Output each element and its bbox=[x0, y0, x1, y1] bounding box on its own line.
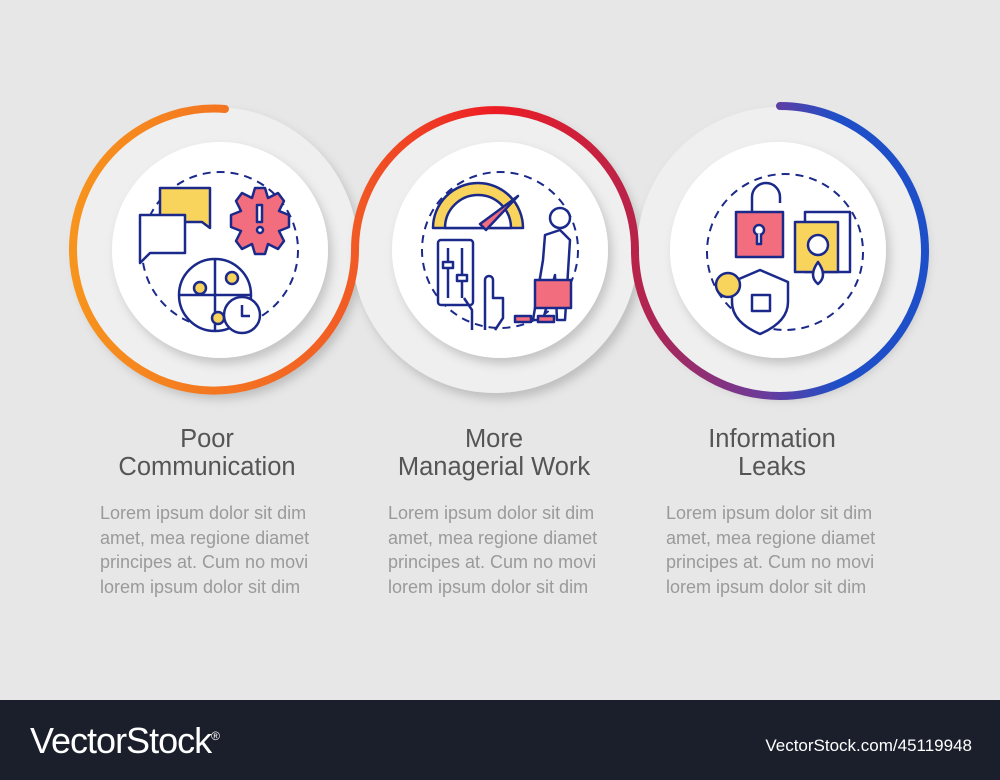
footer url: VectorStock.com/45119948 bbox=[765, 736, 972, 755]
text: body 2: amet, mea regione diamet bbox=[388, 528, 597, 548]
text: body 1: lorem ipsum dolor sit dim bbox=[100, 576, 300, 596]
title: information leaks: Leaks bbox=[738, 453, 806, 481]
text: body 1: principes at. Cum no movi bbox=[100, 552, 308, 572]
title: information leaks bbox=[708, 425, 836, 481]
icon: managerial work bbox=[422, 172, 578, 330]
text: body 2: principes at. Cum no movi bbox=[388, 552, 596, 572]
footer logo: VectorStock® bbox=[30, 720, 219, 761]
text: body 1: amet, mea regione diamet bbox=[100, 528, 309, 548]
gradient ribbon path bbox=[73, 106, 925, 396]
title: information leaks: Information bbox=[708, 425, 836, 453]
text: body 2: lorem ipsum dolor sit dim bbox=[388, 576, 588, 596]
text: body 2: Lorem ipsum dolor sit dim bbox=[388, 503, 594, 523]
text: body 1 bbox=[100, 503, 309, 597]
text: body 3: amet, mea regione diamet bbox=[666, 528, 875, 548]
text: body 3 bbox=[666, 503, 875, 597]
title: managerial work: More bbox=[465, 425, 523, 453]
title: managerial work: Managerial Work bbox=[398, 453, 590, 481]
title: poor communication: Poor bbox=[180, 425, 234, 453]
title: managerial work bbox=[398, 425, 590, 481]
text: body 2 bbox=[388, 503, 597, 597]
text: body 1: Lorem ipsum dolor sit dim bbox=[100, 503, 306, 523]
title: poor communication: Communication bbox=[118, 453, 296, 481]
title: poor communication bbox=[118, 425, 296, 481]
circle backgrounds bbox=[72, 107, 923, 393]
footer bar bbox=[0, 700, 1000, 780]
icon: poor communication bbox=[140, 172, 298, 333]
text: body 3: principes at. Cum no movi bbox=[666, 552, 874, 572]
icon: information leaks bbox=[707, 174, 863, 334]
text: body 3: Lorem ipsum dolor sit dim bbox=[666, 503, 872, 523]
text: body 3: lorem ipsum dolor sit dim bbox=[666, 576, 866, 596]
